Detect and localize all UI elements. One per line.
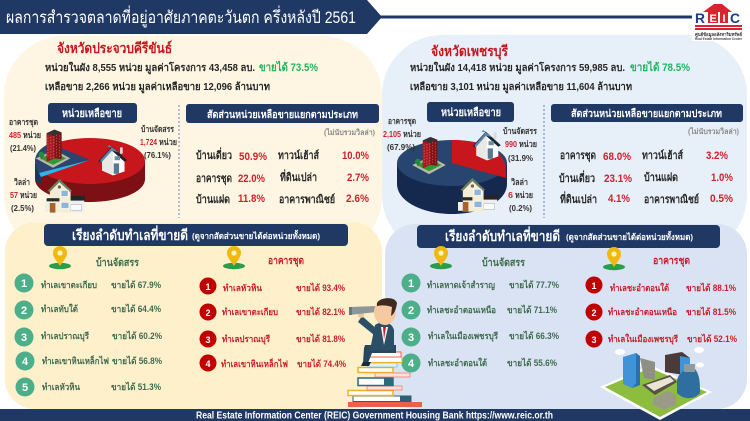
list: right houses: ขายได้ 66.3% [509, 330, 559, 341]
heading box: right breakdown [551, 104, 743, 122]
table: left breakdown by type: อาคารพาณิชย์ [279, 193, 335, 206]
table: left breakdown by type: 2.6% [346, 193, 369, 205]
list: right houses: 3 [408, 332, 414, 344]
list: right condos [586, 276, 737, 348]
title banner [0, 0, 382, 34]
labels: right houses: บ้านจัดสรร [503, 126, 537, 136]
icon: pin left houses [49, 246, 71, 269]
list: left houses: ทำเลทับใต้ [41, 303, 78, 314]
list: left condos: 2 [205, 308, 211, 318]
list: right condos: ทำเลชะอำตอนเหนือ [608, 306, 677, 317]
table: right breakdown by type: 4.1% [608, 193, 630, 205]
list: left houses: 4 [22, 356, 29, 368]
subheading: right houses: บ้านจัดสรร [482, 256, 525, 269]
table: left breakdown by type: บ้านแฝด [196, 193, 230, 206]
list: left condos [200, 278, 346, 372]
list: right houses: ขายได้ 55.6% [507, 357, 557, 368]
table: right breakdown by type: อาคารพาณิชย์ [644, 193, 699, 206]
table: left breakdown by type: ที่ดินเปล่า [280, 169, 317, 184]
heading box: left ranking: (ดูจากสัดส่วนขายได้ต่อหน่วยทั้งหมด) [192, 229, 320, 242]
list: left condos: ทำเลเขาตะเกียบ [222, 307, 278, 317]
table: right breakdown by type: 0.5% [710, 193, 733, 205]
subheading: left condos: อาคารชุด [268, 255, 304, 268]
labels: left condo: หน่วย [23, 130, 41, 140]
heading box: right breakdown: สัดส่วนหน่วยเหลือขายแยกตามประเภท [571, 107, 722, 120]
list: left houses: ขายได้ 67.9% [111, 279, 161, 290]
heading: Prachuap: จังหวัดประจวบคีรีขันธ์ [57, 40, 172, 56]
panel: Prachuap ranking [5, 222, 382, 409]
list: right houses: 1 [408, 278, 414, 290]
labels: left villa: 57 [10, 190, 18, 200]
labels: left condo: 485 [9, 130, 21, 140]
table: right breakdown by type: ทาวน์เฮ้าส์ [642, 149, 683, 162]
table: right breakdown by type: 68.0% [603, 151, 631, 163]
pie chart: right remaining units [397, 140, 507, 214]
panel: Phetchaburi upper background [382, 35, 747, 255]
logo: REIC: ศูนย์ข้อมูลอสังหาริมทรัพย์ [695, 31, 742, 38]
icon: right house [473, 130, 501, 160]
logo: REIC: C [730, 10, 740, 26]
list: left condos: ทำเลปราณบุรี [222, 334, 270, 345]
labels: left villa: วิลล่า [14, 177, 30, 187]
list: right condos: ขายได้ 88.1% [686, 282, 736, 293]
panel: Phetchaburi ranking [385, 224, 747, 409]
list: left houses [14, 274, 162, 396]
list: left houses: ทำเลเขาหินเหล็กไฟ [42, 354, 109, 366]
labels: right villa: หน่วย [515, 190, 533, 200]
subheading: right condos: อาคารชุด [653, 255, 690, 268]
table: right breakdown by type: 3.2% [706, 150, 728, 162]
heading box: right ranking: (ดูจากสัดส่วนขายได้ต่อหน่วยทั้งหมด) [566, 230, 693, 243]
list: left houses: ขายได้ 60.2% [112, 330, 162, 341]
labels: right villa: (0.2%) [509, 203, 532, 213]
list: left condos: 4 [205, 359, 211, 369]
icon: pin left condos [223, 246, 245, 269]
icon: left house [98, 145, 127, 175]
table: left breakdown by type: บ้านเดี่ยว [196, 147, 232, 162]
icon: pin right houses [430, 246, 452, 269]
logo: REIC: R [695, 10, 705, 26]
list: left condos: ขายได้ 82.1% [296, 306, 345, 317]
labels: right condo: หน่วย [403, 129, 421, 139]
logo: REIC [692, 3, 746, 41]
heading box: left ranking: เรียงลำดับทำเลที่ขายดี [72, 225, 188, 243]
labels: left condo: อาคารชุด [9, 117, 38, 128]
list: left houses: 1 [21, 278, 27, 290]
labels: right condo: 2,105 [383, 129, 401, 139]
list: left condos: ขายได้ 93.4% [296, 282, 345, 293]
subheading: left houses: บ้านจัดสรร [96, 256, 139, 269]
table: left breakdown by type: 10.0% [342, 150, 369, 162]
list: left houses: ขายได้ 64.4% [111, 303, 161, 314]
list: left condos: 1 [205, 282, 211, 292]
pie chart: left remaining units [35, 138, 145, 202]
logo: REIC: E [710, 13, 717, 25]
labels: right houses: หน่วย [519, 139, 537, 149]
summary: Phetchaburi: หน่วยในผัง 14,418 หน่วย มูลค่าโครงการ 59,985 ลบ. [410, 61, 625, 75]
note: left excluding villas: (ไม่นับรวมวิลล่า) [324, 127, 375, 137]
labels: right houses: (31.9% [508, 153, 533, 163]
labels: left houses [140, 124, 177, 160]
table: right breakdown by type: บ้านแฝด [644, 171, 678, 184]
labels: left houses: (76.1%) [144, 150, 171, 160]
table: right breakdown by type: บ้านเดี่ยว [559, 170, 595, 185]
note: right excluding villas: (ไม่นับรวมวิลล่า) [688, 126, 739, 136]
table: right breakdown by type: อาคารชุด [560, 150, 596, 163]
table: right breakdown by type: 23.1% [604, 173, 632, 185]
summary: Phetchaburi: เหลือขาย 3,101 หน่วย มูลค่าเหลือขาย 11,604 ล้านบาท [410, 81, 632, 94]
labels: right condo: (67.9%) [387, 142, 415, 152]
heading box: left breakdown [186, 104, 379, 123]
heading box: left units remaining [48, 103, 137, 123]
labels: right houses [503, 126, 537, 163]
illustration: isometric city [600, 347, 712, 420]
labels: right condo [383, 116, 421, 152]
list: right condos: ขายได้ 81.5% [686, 306, 736, 317]
list: left houses: ขายได้ 51.3% [111, 381, 161, 392]
table: left breakdown by type: 50.9% [239, 151, 267, 163]
panel: Prachuap upper background [4, 36, 382, 256]
labels: left houses: 1,724 [140, 137, 157, 147]
list: left condos: ทำเลหัวหิน [223, 283, 263, 293]
list: right condos: ขายได้ 52.1% [687, 333, 737, 344]
heading box: left ranking [44, 224, 348, 246]
heading box: right ranking [417, 225, 720, 248]
labels: right condo: อาคารชุด [388, 116, 416, 127]
summary: Prachuap: หน่วยในผัง 8,555 หน่วย มูลค่าโครงการ 43,458 ลบ. [45, 61, 255, 75]
labels: left condo: (21.4%) [10, 143, 36, 153]
labels: right villa: 6 [508, 190, 513, 200]
icon: left villa [45, 179, 85, 213]
icon: left condo tower [36, 130, 70, 168]
list: left condos: ขายได้ 74.4% [297, 358, 346, 369]
list: left houses: ขายได้ 56.8% [112, 355, 162, 366]
table: right breakdown by type: ที่ดินเปล่า [560, 191, 597, 206]
summary: Phetchaburi [410, 60, 690, 94]
list: right condos: ทำเลชะอำตอนใต้ [610, 282, 669, 293]
summary: Prachuap: ขายได้ 73.5% [259, 60, 318, 74]
list: right houses: ทำเลหาดเจ้าสำราญ [427, 280, 495, 291]
summary: Prachuap: เหลือขาย 2,266 หน่วย มูลค่าเหลือขาย 12,096 ล้านบาท [45, 81, 270, 94]
summary: Phetchaburi: ขายได้ 78.5% [630, 60, 690, 74]
list: right condos: 3 [591, 335, 597, 345]
list: left houses: 2 [21, 305, 27, 317]
heading box: left units remaining: หน่วยเหลือขาย [62, 107, 122, 120]
list: left houses: ทำเลเขาตะเกียบ [41, 280, 97, 290]
labels: left villa: (2.5%) [11, 203, 34, 213]
heading box: right ranking: เรียงลำดับทำเลที่ขายดี [445, 226, 560, 244]
list: right condos: 1 [591, 281, 597, 291]
labels: right villa [508, 177, 533, 213]
labels: left villa: หน่วย [20, 190, 37, 200]
icon: right condo tower [412, 137, 446, 174]
labels: right villa: วิลล่า [511, 177, 528, 187]
list: left houses: 5 [22, 382, 28, 394]
table: left breakdown by type: 2.7% [347, 172, 369, 184]
illustration: man on books with telescope [348, 298, 422, 407]
title banner: ผลการสำรวจตลาดที่อยู่อาศัยภาคตะวันตก ครึ่งหลังปี 2561 [6, 5, 356, 28]
list: right houses: ขายได้ 77.7% [509, 279, 559, 290]
header rule [378, 16, 692, 18]
table: left breakdown by type: 22.0% [238, 173, 265, 185]
table: left breakdown by type: อาคารชุด [196, 173, 232, 186]
labels: left houses: บ้านจัดสรร [141, 124, 174, 134]
labels: left houses: หน่วย [159, 137, 177, 147]
list: left houses: ทำเลปราณบุรี [41, 331, 89, 342]
logo: REIC: I [722, 13, 726, 25]
summary: Prachuap [45, 60, 318, 94]
list: left condos: ขายได้ 81.8% [296, 333, 345, 344]
list: left houses: ทำเลหัวหิน [42, 382, 81, 392]
heading: Phetchaburi: จังหวัดเพชรบุรี [431, 43, 508, 60]
list: right houses: 4 [408, 358, 415, 370]
list: right houses: ทำเลในเมืองเพชรบุรี [428, 330, 498, 342]
table: right breakdown by type: 1.0% [711, 172, 733, 184]
footer bar [0, 409, 750, 421]
heading box: right units remaining: หน่วยเหลือขาย [441, 106, 501, 119]
list: right houses: ขายได้ 71.1% [507, 304, 557, 315]
table: left breakdown by type [196, 147, 369, 206]
icon: right villa [458, 178, 498, 212]
logo: REIC: Real Estate Information Center [695, 37, 743, 41]
list: right houses: ทำเลชะอำตอนเหนือ [427, 304, 496, 315]
heading box: right units remaining [427, 102, 514, 122]
list: right houses [402, 274, 559, 372]
list: right houses: 2 [408, 305, 414, 317]
list: left houses: 3 [21, 332, 27, 344]
labels: right houses: 990 [505, 139, 517, 149]
labels: left villa [10, 177, 37, 213]
list: left condos: ทำเลเขาหินเหล็กไฟ [221, 357, 288, 369]
list: left condos: 3 [205, 335, 211, 345]
heading box: left breakdown: สัดส่วนหน่วยเหลือขายแยกตามประเภท [207, 108, 358, 121]
list: right houses: ทำเลชะอำตอนใต้ [428, 357, 487, 368]
table: left breakdown by type: ทาวน์เฮ้าส์ [278, 149, 319, 162]
labels: left condo [9, 117, 41, 153]
icon: pin right condos [603, 247, 625, 270]
table: left breakdown by type: 11.8% [238, 193, 265, 205]
table: right breakdown by type [559, 149, 733, 206]
list: right condos: 2 [591, 308, 597, 318]
list: right condos: ทำเลในเมืองเพชรบุรี [608, 333, 678, 345]
